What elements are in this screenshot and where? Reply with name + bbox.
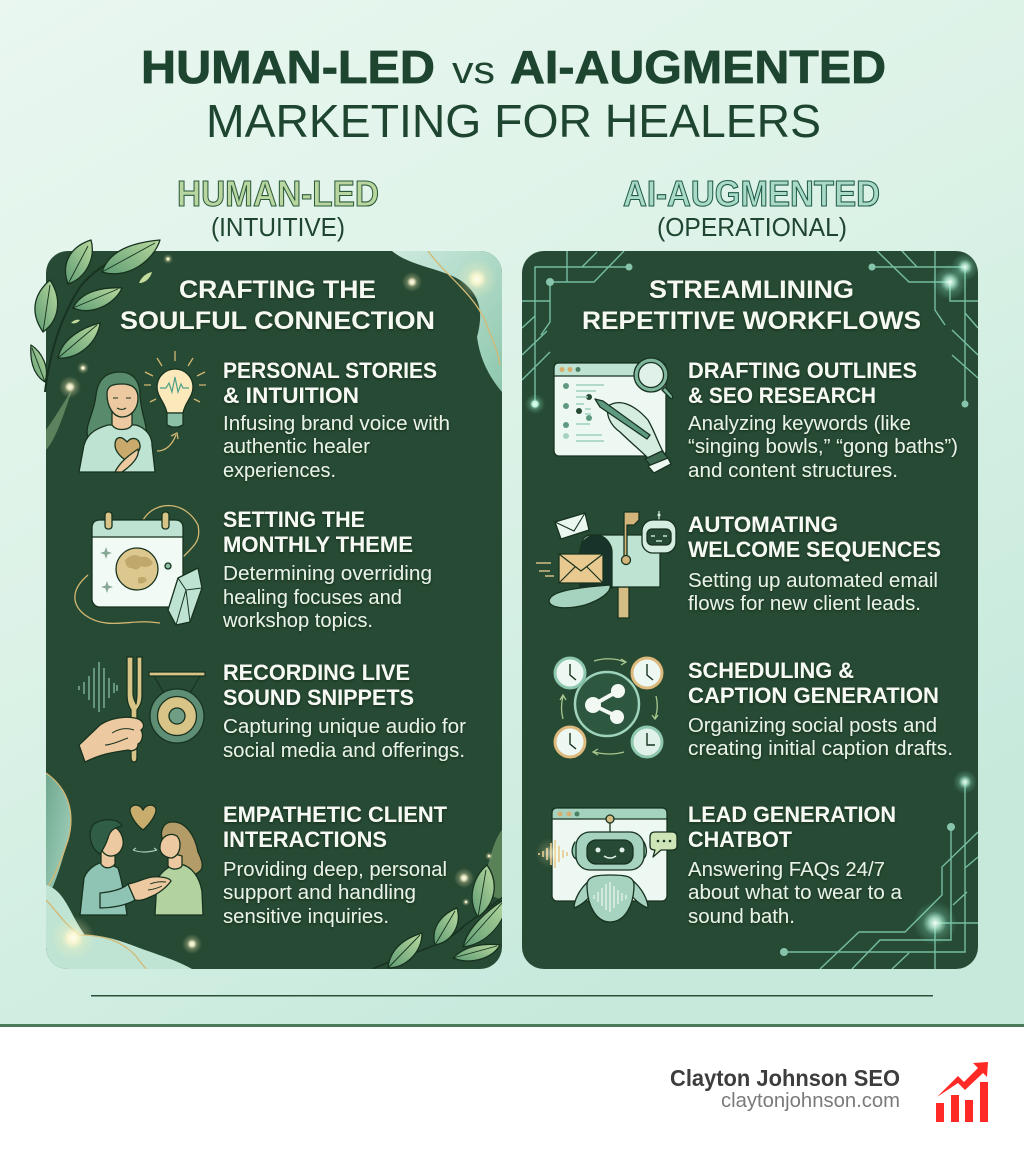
- text: human-led panel: CRAFTING THE: [179, 276, 376, 304]
- text: human-led panel: & INTUITION: [223, 383, 359, 408]
- text: ai-augmented panel: CAPTION GENERATION: [688, 683, 939, 708]
- column heading: human-led: [177, 173, 379, 242]
- column heading: ai-augmented: (OPERATIONAL): [657, 212, 847, 242]
- text: ai-augmented panel: REPETITIVE WORKFLOWS: [582, 307, 921, 335]
- text: human-led panel: SETTING THE: [223, 507, 365, 532]
- text: ai-augmented panel: Setting up automated email: [688, 570, 938, 592]
- text: human-led panel: SOUND SNIPPETS: [223, 685, 414, 710]
- column heading: ai-augmented: [623, 173, 880, 242]
- text: human-led panel: Infusing brand voice with: [223, 413, 450, 435]
- decoration: leaf branch bottom-right: [373, 865, 507, 969]
- icon: chatbot in browser window: [535, 808, 677, 922]
- text: human-led panel: Capturing unique audio for: [223, 716, 466, 738]
- text: human-led panel: RECORDING LIVE: [223, 660, 410, 685]
- icon: tuning fork, gong and hand: [79, 657, 205, 762]
- icon: two people in empathetic conversation: [80, 805, 203, 915]
- decoration: leaf branch top-left: [31, 240, 160, 392]
- text: ai-augmented panel: & SEO RESEARCH: [688, 383, 876, 408]
- text: human-led panel: SOULFUL CONNECTION: [120, 307, 435, 335]
- text: ai-augmented panel: and content structures.: [688, 460, 898, 482]
- text: ai-augmented panel: LEAD GENERATION: [688, 802, 896, 827]
- text: human-led panel: [120, 276, 466, 928]
- text: ai-augmented panel: Answering FAQs 24/7: [688, 859, 885, 881]
- text: ai-augmented panel: WELCOME SEQUENCES: [688, 537, 941, 562]
- text: human-led panel: authentic healer: [223, 436, 370, 458]
- footer brand text: Clayton Johnson SEO: [670, 1065, 900, 1091]
- text: ai-augmented panel: SCHEDULING &: [688, 658, 854, 683]
- text: human-led panel: Providing deep, personal: [223, 859, 447, 881]
- text: ai-augmented panel: creating initial caption drafts.: [688, 738, 953, 760]
- panel: ai-augmented: [522, 251, 979, 969]
- text: ai-augmented panel: sound bath.: [688, 906, 795, 928]
- column heading: human-led: HUMAN-LED: [177, 173, 379, 214]
- icon: calendar with moon and crystal: [75, 506, 202, 625]
- text: ai-augmented panel: Organizing social posts and: [688, 715, 937, 737]
- text: human-led panel: experiences.: [223, 460, 336, 482]
- text: ai-augmented panel: AUTOMATING: [688, 512, 838, 537]
- text: human-led panel: support and handling: [223, 882, 416, 904]
- icon: red growth chart logo: [936, 1062, 988, 1122]
- title: MARKETING FOR HEALERS: [206, 95, 821, 147]
- text: human-led panel: workshop topics.: [222, 610, 373, 632]
- text: ai-augmented panel: Analyzing keywords (like: [688, 413, 911, 435]
- text: ai-augmented panel: flows for new client leads.: [688, 593, 921, 615]
- text: human-led panel: PERSONAL STORIES: [223, 358, 437, 383]
- icon: mailbox with envelopes and robot: [536, 511, 676, 618]
- title: vs: [452, 50, 495, 92]
- text: human-led panel: EMPATHETIC CLIENT: [223, 802, 448, 827]
- text: human-led panel: INTERACTIONS: [223, 827, 387, 852]
- title: HUMAN-LED: [141, 41, 435, 93]
- decoration: sparkles: [59, 254, 493, 954]
- title: [141, 41, 886, 147]
- text: ai-augmented panel: CHATBOT: [688, 827, 793, 852]
- column heading: human-led: (INTUITIVE): [211, 212, 345, 242]
- panel: human-led: [46, 251, 502, 969]
- divider: [91, 995, 933, 996]
- text: human-led panel: sensitive inquiries.: [223, 906, 389, 928]
- text: ai-augmented panel: about what to wear to a: [688, 882, 903, 904]
- icon: healer with heart and light bulb: [79, 351, 206, 472]
- text: ai-augmented panel: DRAFTING OUTLINES: [688, 358, 917, 383]
- icon: browser with robot hand and magnifier: [554, 358, 673, 473]
- text: human-led panel: MONTHLY THEME: [223, 532, 413, 557]
- text: human-led panel: healing focuses and: [223, 587, 402, 609]
- text: human-led panel: social media and offerings.: [223, 740, 465, 762]
- text: human-led panel: Determining overriding: [223, 563, 432, 585]
- text: ai-augmented panel: “singing bowls,” “gong baths”): [688, 436, 958, 458]
- footer brand text: claytonjohnson.com: [721, 1090, 900, 1112]
- text: ai-augmented panel: [582, 276, 958, 928]
- text: ai-augmented panel: STREAMLINING: [649, 276, 854, 304]
- icon: share node with four clocks: [554, 657, 663, 758]
- footer brand text: [670, 1065, 900, 1112]
- footer band: [0, 1024, 1024, 1154]
- column heading: ai-augmented: AI-AUGMENTED: [623, 173, 880, 214]
- title: AI-AUGMENTED: [510, 41, 886, 93]
